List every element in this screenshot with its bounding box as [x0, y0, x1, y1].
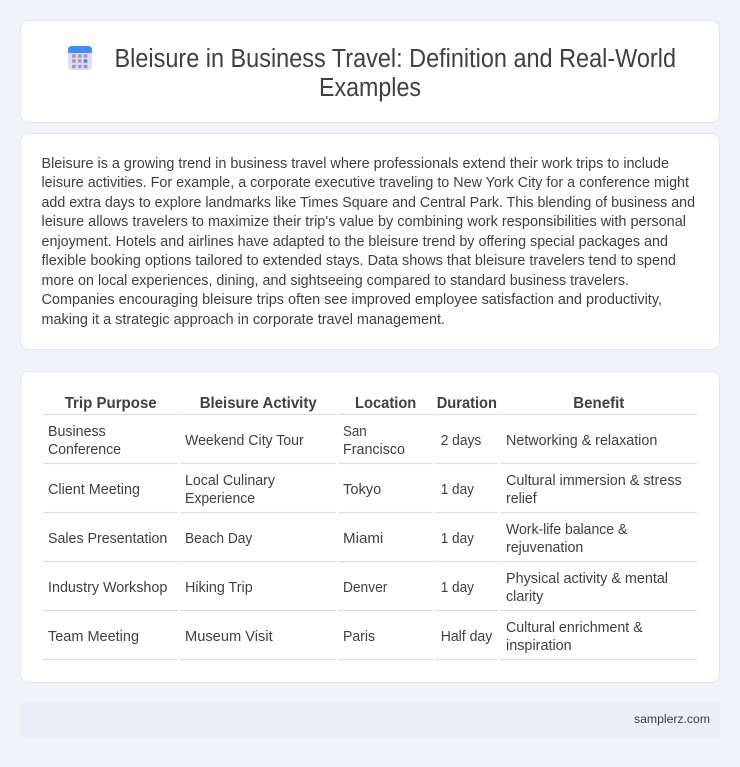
table row: sales presentation [43, 522, 697, 562]
table row: client meeting: 1 day [441, 482, 475, 498]
table row: sales presentation: Miami [343, 531, 383, 547]
table row: client meeting: Cultural immersion & stress [506, 473, 682, 489]
table row: industry workshop: Physical activity & mental [506, 571, 668, 587]
table header row [43, 395, 697, 414]
table row: industry workshop: Industry Workshop [48, 580, 167, 596]
title [114, 45, 676, 102]
text block: bleisure overview: Bleisure is a growing trend in business travel where professionals extend their work trips to include [42, 155, 669, 172]
table row: business conference: Business [48, 424, 106, 440]
table row: industry workshop: Hiking Trip [185, 580, 253, 596]
footer: samplerz.com [634, 712, 710, 726]
table row: client meeting: Client Meeting [48, 482, 140, 498]
table header row: Bleisure Activity [200, 395, 317, 412]
table row: business conference: Francisco [343, 442, 405, 458]
table row: sales presentation: Work-life balance & [506, 522, 627, 538]
footer [20, 703, 720, 737]
text block: bleisure overview: leisure activities. For example, a corporate executive traveling to New York City for a conference might [42, 174, 690, 191]
title: Bleisure in Business Travel: Definition and Real-World [114, 45, 676, 73]
text block: bleisure overview: making it a strategic approach in corporate travel management. [42, 311, 445, 328]
table row: team meeting [43, 620, 697, 660]
table row: team meeting: inspiration [506, 638, 572, 654]
table header row: Benefit [573, 395, 625, 412]
panel: title header [20, 20, 720, 122]
table row: sales presentation: Beach Day [185, 531, 253, 547]
table row: team meeting: Paris [343, 629, 375, 645]
table row: team meeting: Half day [441, 629, 493, 645]
table row: client meeting: relief [506, 491, 538, 507]
table row: industry workshop: Denver [343, 580, 387, 596]
table header row: Trip Purpose [65, 395, 157, 412]
panel: description [20, 134, 720, 350]
table row: business conference: 2 days [441, 433, 481, 449]
table row: business conference: Conference [48, 442, 121, 458]
text block: bleisure overview: more on local experiences, dining, and sightseeing compared to standard business travelers. [42, 272, 629, 289]
icon: calendar [68, 46, 92, 70]
table row: client meeting: Local Culinary [185, 473, 276, 489]
text block: bleisure overview: add extra days to explore landmarks like Times Square and Central Park. This blending of business and [42, 194, 695, 211]
table row: business conference: Networking & relaxation [506, 433, 657, 449]
panel: examples table [20, 372, 720, 682]
table row: industry workshop: 1 day [441, 580, 475, 596]
title: Examples [319, 74, 421, 102]
table row: sales presentation: 1 day [441, 531, 475, 547]
table row: business conference [43, 424, 697, 464]
table row: client meeting [43, 473, 697, 512]
table header row: Location [355, 395, 416, 412]
table header row: Duration [437, 395, 497, 412]
table row: industry workshop: clarity [506, 589, 544, 605]
table row: sales presentation: Sales Presentation [48, 531, 167, 547]
text block: bleisure overview: Companies encouraging bleisure trips often see improved employee satisfaction and productivity, [42, 291, 662, 308]
text block: bleisure overview [42, 155, 695, 328]
table row: business conference: Weekend City Tour [185, 433, 304, 449]
table row: team meeting: Museum Visit [185, 629, 273, 645]
text block: bleisure overview: leisure allows travelers to maximize their trip's value by combining work responsibilities with personal [42, 213, 686, 230]
text block: bleisure overview: enjoyment. Hotels and airlines have adapted to the bleisure trend by offering special packages and [42, 233, 668, 250]
table row: client meeting: Experience [185, 491, 255, 507]
table row: industry workshop [43, 571, 697, 610]
table row: sales presentation: rejuvenation [506, 540, 583, 556]
table row: team meeting: Cultural enrichment & [506, 620, 643, 636]
text block: bleisure overview: flexible booking options tailored to extended stays. Data shows that bleisure travelers tend to spend [42, 252, 676, 269]
table row: client meeting: Tokyo [343, 482, 381, 498]
table row: business conference: San [343, 424, 367, 440]
table row: team meeting: Team Meeting [48, 629, 139, 645]
